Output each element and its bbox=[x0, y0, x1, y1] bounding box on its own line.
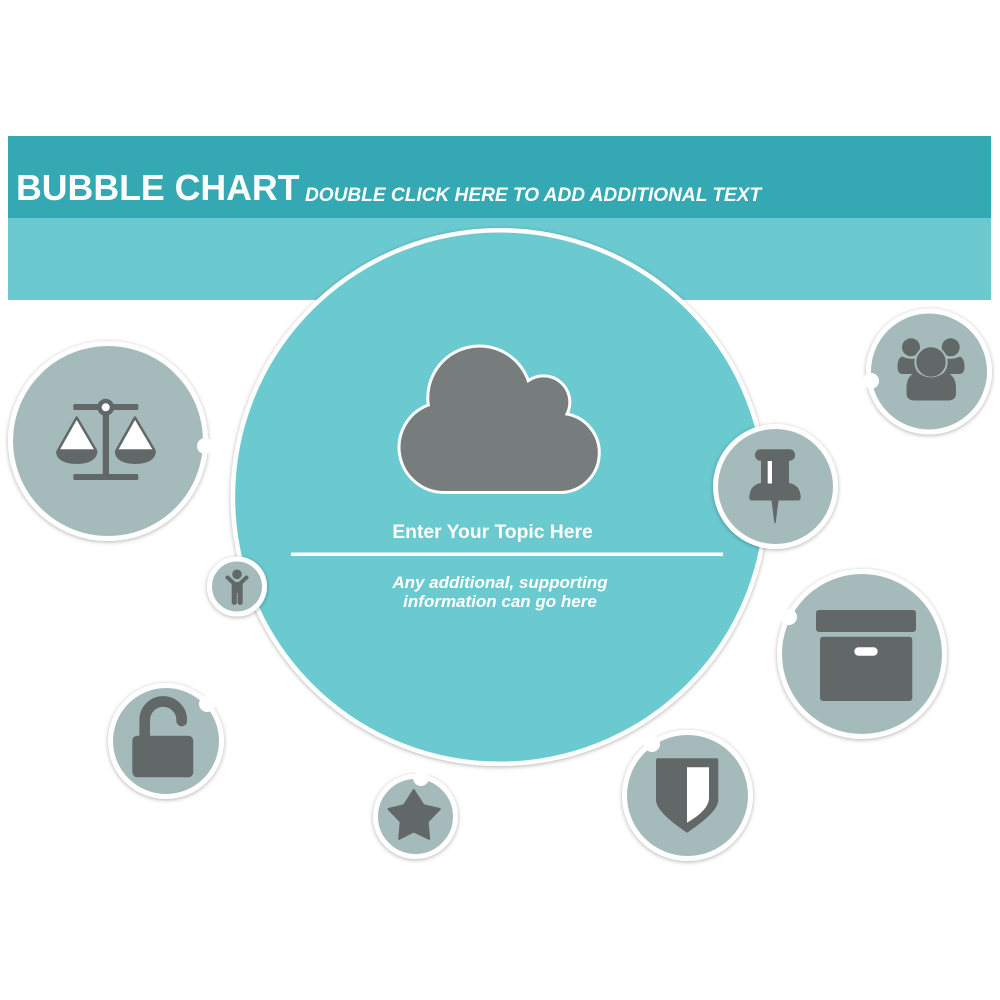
bubble: scales bbox=[10, 344, 206, 538]
bubble: pushpin bbox=[716, 426, 836, 546]
connector dot: padlock bbox=[199, 696, 215, 712]
connector dot: scales bbox=[197, 438, 213, 454]
icon: shield bbox=[656, 758, 718, 833]
connector stubs bbox=[212, 373, 754, 772]
supporting text: Any additional, supporting bbox=[391, 573, 608, 592]
connector dot: star bbox=[413, 770, 429, 786]
header band: dark title bar bbox=[8, 136, 991, 218]
title: BUBBLE CHART bbox=[16, 168, 300, 208]
bubble: archive box bbox=[780, 572, 944, 736]
bubble: padlock bbox=[110, 686, 222, 796]
icon: star bbox=[388, 790, 440, 839]
icon: group of people bbox=[898, 338, 964, 400]
icon: balance scales bbox=[56, 399, 156, 480]
icon: pushpin bbox=[749, 449, 801, 523]
supporting text: information can go here bbox=[403, 592, 597, 611]
subtitle: DOUBLE CLICK HERE TO ADD ADDITIONAL TEXT bbox=[305, 185, 762, 206]
panel: main central bubble bbox=[233, 230, 766, 764]
main circle bbox=[233, 230, 766, 764]
icon: open padlock bbox=[132, 702, 193, 777]
bubble: star bbox=[376, 776, 456, 856]
topic heading: Enter Your Topic Here bbox=[392, 522, 593, 543]
connector dot: people bbox=[863, 373, 879, 389]
bubble: person bbox=[210, 559, 264, 614]
bubble: shield bbox=[624, 732, 750, 858]
header band: light lower bar bbox=[8, 218, 991, 300]
divider line bbox=[291, 552, 723, 556]
icon: person bbox=[228, 570, 246, 605]
icon: cloud bbox=[399, 346, 599, 493]
connector dot: box bbox=[781, 609, 797, 625]
icon: archive box bbox=[816, 610, 916, 701]
connector dot: shield bbox=[644, 736, 660, 752]
bubble: people bbox=[868, 311, 990, 432]
